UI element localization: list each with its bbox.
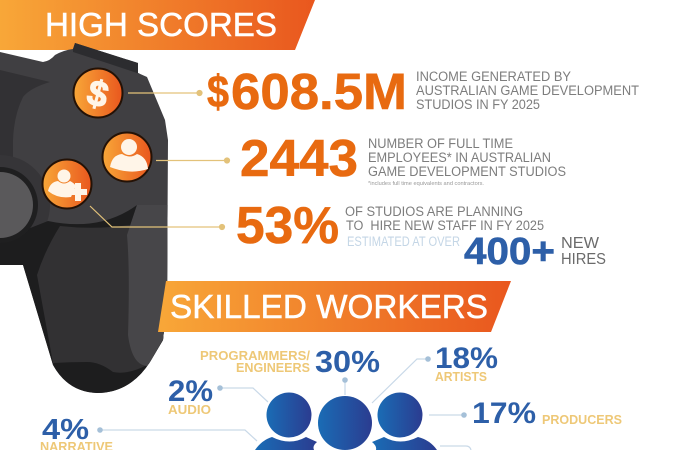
stat: income: 608.5M [231, 63, 407, 120]
icon: dollar button: $ [83, 71, 113, 116]
icon: person button [102, 132, 152, 182]
label: programmers: 30% [315, 344, 380, 379]
connector lines: skilled workers [97, 356, 471, 450]
stat: hiring: 400+ [464, 231, 555, 273]
stat: employees: EMPLOYEES* IN AUSTRALIAN [368, 150, 551, 165]
stat: hiring: NEW [561, 235, 600, 252]
label: audio: 2% [168, 375, 213, 408]
label: audio: AUDIO [168, 403, 211, 417]
stat: hiring: TO HIRE NEW STAFF IN FY 2025 [346, 218, 544, 233]
banner: high scores: HIGH SCORES [45, 6, 277, 43]
stat: hiring: HIRES [561, 251, 606, 268]
stat: hiring [236, 197, 606, 273]
icon: people group [255, 392, 437, 450]
stat: employees: GAME DEVELOPMENT STUDIOS [368, 164, 566, 179]
label: producers [472, 397, 622, 430]
stat: employees [240, 130, 566, 188]
stat: employees: *includes full time equivalents and contractors. [368, 181, 484, 187]
label: programmers: PROGRAMMERS/ [200, 349, 311, 363]
label: programmers [200, 344, 380, 379]
banner: skilled workers: SKILLED WORKERS [170, 288, 488, 325]
stat: employees: 2443 [240, 130, 358, 188]
icon: add person button [42, 160, 92, 208]
label: producers: 17% [472, 397, 536, 430]
stat: income: STUDIOS IN FY 2025 [416, 97, 540, 112]
stat: income: AUSTRALIAN GAME DEVELOPMENT [416, 83, 639, 98]
stat: employees: NUMBER OF FULL TIME [368, 136, 513, 151]
banner: high scores [0, 0, 315, 50]
icon: dollar button [74, 68, 122, 118]
label: narrative [40, 414, 113, 450]
label: artists: ARTISTS [435, 370, 487, 384]
label: programmers: ENGINEERS [236, 361, 310, 375]
game controller [0, 40, 170, 395]
stat: hiring: ESTIMATED AT OVER [347, 234, 460, 249]
stat: hiring: 53% [236, 197, 339, 255]
banner: skilled workers [158, 281, 511, 332]
stat: income: INCOME GENERATED BY [416, 69, 571, 84]
stat: hiring: OF STUDIOS ARE PLANNING [345, 204, 523, 219]
connector lines: high scores [90, 90, 230, 230]
stat: income [207, 63, 639, 120]
label: artists: 18% [435, 342, 498, 375]
stat: income: $ [207, 66, 229, 117]
label: narrative: 4% [42, 414, 89, 446]
label: producers: PRODUCERS [542, 413, 622, 427]
